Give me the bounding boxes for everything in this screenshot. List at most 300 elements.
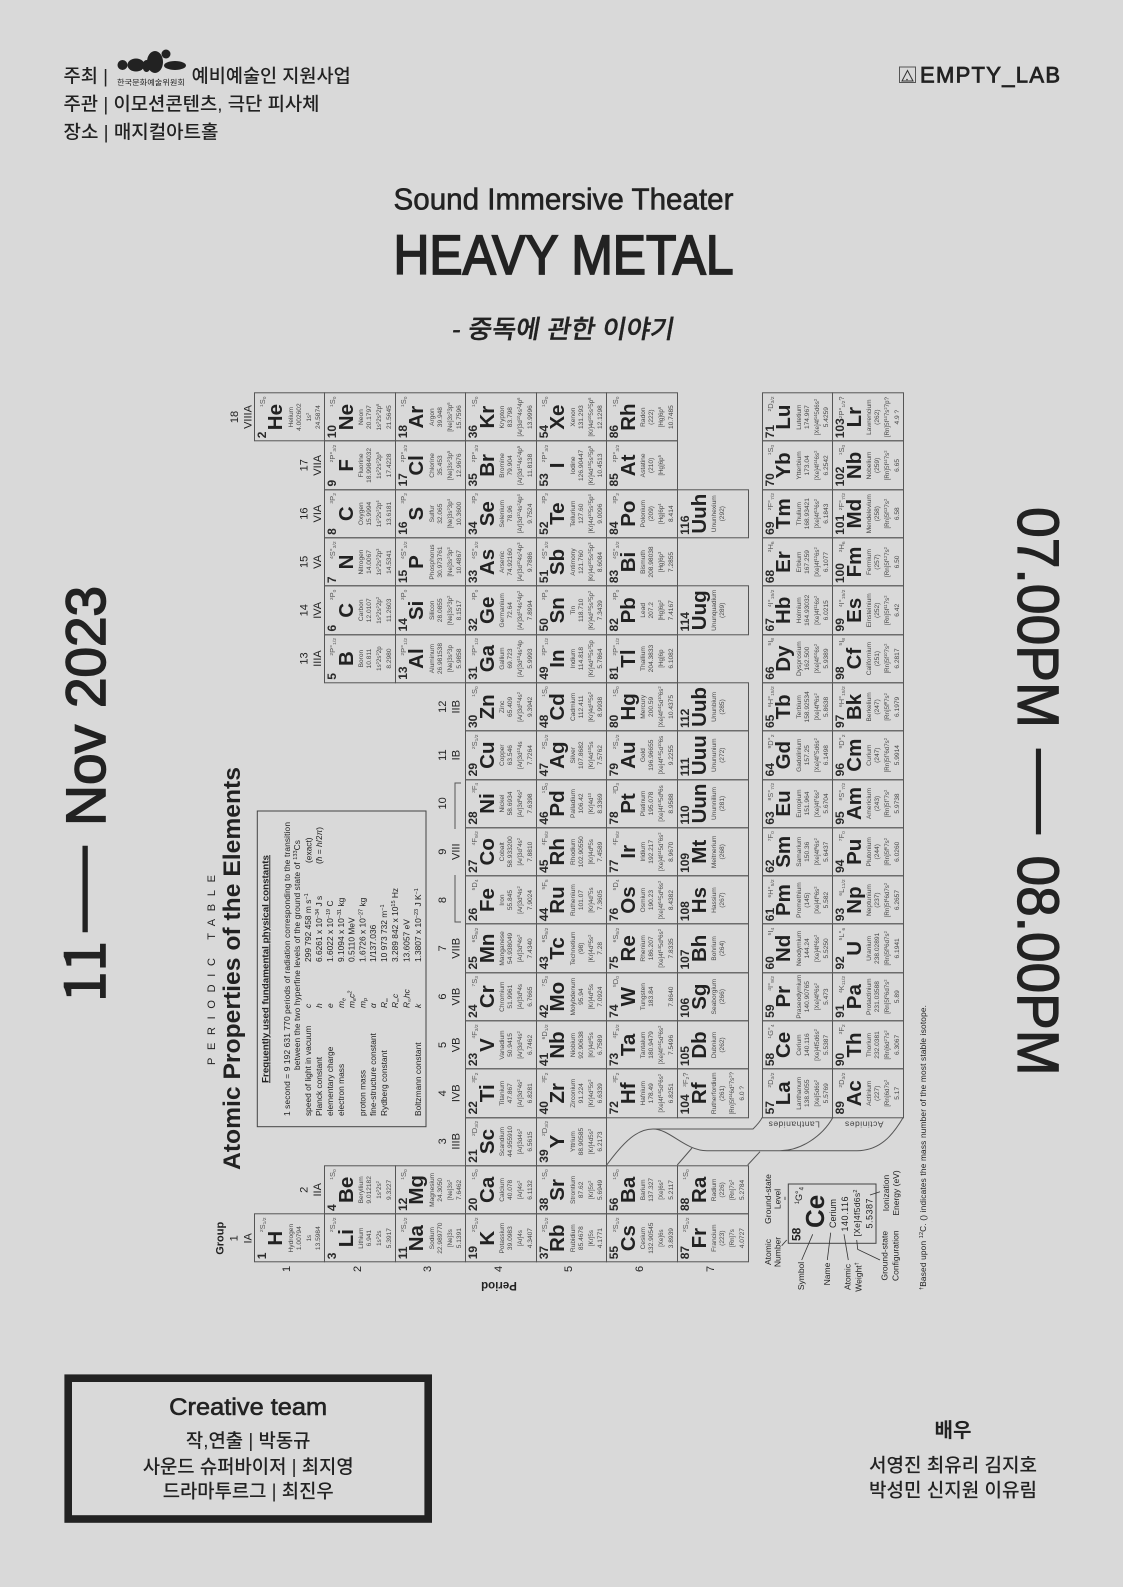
Ga: Gallium	[499, 647, 506, 670]
legend: element key: 5.5387	[865, 1198, 875, 1228]
I: [Kr]4d105s25p5	[587, 446, 595, 485]
Ta: 7.5496	[668, 1035, 675, 1055]
La: La	[772, 1081, 795, 1105]
time: 08.00PM	[1005, 856, 1070, 1076]
Ar: 39.948	[437, 407, 444, 427]
constants text: C	[325, 900, 335, 909]
Cs	[606, 1214, 678, 1263]
group labels: 14	[298, 604, 310, 616]
Pr: [Xe]4f36s2	[813, 983, 821, 1010]
Ni: [Ar]3d84s2	[516, 790, 524, 817]
Po: Polonium	[640, 500, 647, 527]
Db: (262)	[719, 1037, 726, 1053]
group labels: IVA	[312, 601, 324, 619]
Pd: 106.42	[578, 793, 585, 814]
Tm	[762, 489, 833, 538]
I: 2P°3/2	[540, 445, 550, 462]
W: Tungsten	[640, 983, 647, 1010]
Am: Am	[843, 787, 866, 820]
In: 114.818	[578, 647, 585, 670]
Ru: Ruthenium	[570, 884, 577, 916]
Mn: Mn	[476, 934, 499, 963]
Es: [Rn]5f117s2	[884, 596, 891, 625]
F: 18.9984032	[366, 448, 373, 483]
Fm: 3H6	[837, 541, 847, 552]
Cu: 29	[466, 763, 480, 776]
Ni: 58.6934	[507, 792, 514, 815]
period labels: 5	[563, 1266, 575, 1272]
Cm: (247)	[874, 747, 881, 763]
Fm	[832, 537, 904, 587]
P: 30.973761	[437, 546, 444, 578]
No: Nb	[843, 452, 866, 479]
Th: 232.0381	[874, 1031, 881, 1059]
Bi: Bismuth	[640, 550, 647, 574]
icon: arts council logo: 한국문화예술위원회	[117, 77, 185, 87]
Br: 79.904	[507, 455, 514, 475]
Ba: Ba	[617, 1177, 640, 1203]
group labels: VIIIA	[242, 404, 254, 429]
Se: 78.96	[507, 505, 514, 522]
Zr	[536, 1069, 607, 1118]
Bi: 83	[607, 570, 621, 583]
Pa: Protactinium	[866, 978, 873, 1015]
footnote: †	[919, 1287, 925, 1290]
Lr: 103	[833, 418, 847, 438]
Ta: [Xe]4f145d36s2	[658, 1026, 665, 1064]
Cs: Cesium	[640, 1227, 647, 1249]
Al: 2P°1/2	[399, 638, 409, 656]
Po: 3P2	[611, 493, 621, 504]
group labels: VIIA	[312, 454, 324, 476]
legend: element key: 2	[853, 1190, 859, 1193]
Fr: Francium	[711, 1224, 718, 1252]
Ce: Ce	[772, 1032, 795, 1058]
Zn: 30	[466, 715, 480, 728]
Al: 26.981538	[437, 643, 444, 674]
constants text: 1/137.036	[368, 924, 378, 962]
Mo	[536, 972, 607, 1021]
Ag: 47	[537, 763, 551, 776]
O: Oxygen	[358, 502, 365, 525]
Pd: 46	[537, 811, 551, 825]
I: 10.4513	[597, 453, 604, 477]
Si: 3P0	[399, 590, 409, 600]
Mn: [Ar]3d54s2	[516, 935, 524, 962]
Bh	[677, 924, 749, 973]
Bi: Bi	[617, 552, 640, 572]
He: 1s2	[305, 413, 312, 422]
Co: 4F9/2	[470, 831, 480, 845]
Gd: Gadolinium	[796, 739, 803, 772]
constants text: speed of light in vacuum	[303, 1026, 313, 1116]
Fr: Fr	[688, 1228, 711, 1248]
Sb: Sb	[546, 549, 569, 575]
Co: 7.8810	[527, 842, 534, 862]
constants text: α	[368, 1003, 378, 1008]
group labels: Group	[214, 1222, 226, 1255]
Ru: 44	[537, 908, 551, 921]
Se: Selenium	[499, 500, 506, 527]
Rf: 6.0 ?	[739, 1086, 746, 1101]
Xe: [Kr]4d105s25p6	[587, 398, 595, 437]
Pm: Promethium	[796, 882, 803, 918]
Lu: [Xe]4f145d6s2	[813, 399, 821, 435]
Tc: 43	[537, 956, 551, 970]
Ne: 20.1797	[366, 405, 373, 429]
constants text: Boltzmann constant	[413, 1042, 423, 1116]
Np: [Rn]5f46d7s2	[884, 883, 891, 917]
group labels: 17	[298, 459, 310, 471]
K: 4.3407	[527, 1228, 534, 1248]
Uub: Ununbium	[711, 692, 718, 722]
Uuh: 116	[678, 515, 692, 535]
F: Fluorine	[358, 453, 365, 477]
Ho: Holmium	[796, 597, 803, 623]
Br: 35	[466, 473, 480, 487]
Pu: [Rn]5f67s2	[884, 838, 891, 866]
Cf: 6.2817	[894, 649, 901, 669]
constants text: m	[358, 1001, 368, 1008]
Hg: Mercury	[640, 695, 647, 719]
Xe: 54	[537, 425, 551, 438]
Ta: Tantalum	[640, 1032, 647, 1058]
Pd: 8.3369	[597, 793, 604, 814]
constants text: −19	[326, 909, 332, 918]
Sr	[536, 1165, 607, 1215]
Pt: Pt	[617, 793, 640, 814]
O: 13.6181	[386, 502, 393, 526]
Mt: 109	[678, 853, 692, 873]
Sr: 38	[537, 1198, 551, 1211]
Mn: 25	[466, 956, 480, 970]
Ac: 89	[833, 1101, 847, 1114]
Bk: 6H°15/2	[837, 686, 847, 707]
Sr: [Kr]5s2	[587, 1181, 595, 1199]
Ba: 137.327	[648, 1178, 655, 1202]
Fm: [Rn]5f127s2	[884, 547, 891, 577]
S: [Ne]3s23p4	[446, 499, 454, 528]
legend: element key: Cerium	[828, 1199, 838, 1228]
Cs: 55	[607, 1246, 621, 1259]
Ac: 5.17	[894, 1087, 901, 1100]
Hf: 72	[607, 1101, 621, 1114]
Nd: 5.5250	[823, 938, 830, 958]
Na: 11	[396, 1247, 410, 1259]
Sc: 21	[466, 1149, 480, 1163]
Pb: Lead	[640, 603, 647, 618]
Rf: Rutherfordium	[711, 1072, 718, 1114]
Uuu: Unununium	[711, 738, 718, 772]
Rn: 1S0	[611, 396, 621, 407]
constants text: 2	[348, 991, 354, 995]
Cu	[465, 731, 537, 780]
icon: arts council logo	[117, 50, 186, 87]
constants text: (ħ = h/2π)	[314, 827, 324, 864]
Ga: 69.723	[507, 649, 514, 669]
Fm: 6.50	[894, 556, 901, 568]
cast names: 서영진 최유리 김지호	[869, 1455, 1037, 1477]
K: 39.0983	[507, 1226, 514, 1250]
constants text: 1.3807 x 10	[413, 918, 423, 962]
Ir: 77	[607, 860, 621, 873]
Pu	[832, 827, 904, 876]
Be	[324, 1165, 396, 1215]
constants text: between the two hyperfine levels of the ground state of	[292, 862, 302, 1070]
Ti: Titanium	[499, 1081, 506, 1106]
Hf: Hafnium	[640, 1081, 647, 1106]
group labels: 18	[229, 411, 241, 423]
Rn: (222)	[648, 409, 655, 425]
Ag	[536, 731, 607, 780]
Cl: 2P°3/2	[399, 445, 409, 462]
Pt: 78	[607, 811, 621, 825]
group labels: VIB	[450, 988, 462, 1005]
N	[324, 537, 396, 587]
Md: Mendelevium	[866, 494, 873, 533]
Na: 2S1/2	[399, 1218, 409, 1232]
Ne: 1S0	[328, 396, 339, 407]
In: Indium	[570, 649, 577, 668]
Gd: Gd	[772, 741, 795, 769]
Rn: 10.7485	[668, 405, 675, 429]
Dy: Dy	[772, 645, 795, 672]
Te: Te	[546, 503, 569, 525]
group labels: VIIB	[450, 938, 462, 959]
In: [Kr]4d105s25p	[587, 640, 595, 677]
Lr: [Rn]5f147s27p?	[884, 397, 891, 437]
As: As	[476, 549, 499, 575]
Ra: Ra	[688, 1177, 711, 1203]
Al: Aluminum	[429, 644, 436, 673]
K: [Ar]4s	[517, 1230, 524, 1246]
Hg: [Xe]4f145d106s2	[658, 686, 665, 727]
Sg: Seaborgium	[711, 979, 718, 1014]
Pa: Pa	[843, 984, 866, 1009]
Ti: 22	[466, 1101, 480, 1114]
Uuq	[677, 586, 749, 635]
Tm: Thulium	[796, 502, 803, 525]
Rh: 4F9/2	[540, 831, 550, 845]
Sb: 51	[537, 570, 551, 583]
Nd: Nd	[772, 935, 795, 962]
Rb	[536, 1214, 607, 1263]
Bi: 4S°3/2	[611, 541, 621, 559]
constants text: k	[413, 1003, 423, 1008]
Hs: Hassium	[711, 887, 718, 913]
C: Carbon	[358, 599, 365, 621]
Nd: 60	[763, 956, 777, 970]
constants text: 10 973 732 m	[379, 911, 389, 962]
W: 183.84	[648, 987, 655, 1007]
Ir: Iridium	[640, 842, 647, 862]
Er: 68	[763, 570, 777, 583]
Lu	[762, 392, 833, 442]
Lr: Lr	[843, 407, 866, 427]
S: 3P2	[399, 493, 409, 504]
Yb: Yb	[772, 452, 795, 479]
Md: 2F°7/2	[837, 493, 847, 510]
Tc: 7.28	[597, 942, 604, 955]
date: Nov	[54, 725, 117, 826]
Y: 39	[537, 1149, 551, 1163]
Sm	[762, 827, 833, 876]
Ir: Ir	[617, 845, 640, 859]
Be: 9.012182	[366, 1176, 373, 1204]
Ho: 4I°15/2	[766, 590, 776, 607]
Au: [Xe]4f145d106s	[658, 736, 665, 775]
Pu: 94	[833, 860, 847, 873]
Tc: (98)	[578, 943, 585, 954]
Er: Erbium	[796, 552, 803, 572]
B	[324, 634, 396, 683]
Po: Po	[617, 501, 640, 527]
C: C	[335, 603, 358, 618]
Pd: [Kr]4d10	[587, 793, 595, 814]
U: 6.1941	[894, 938, 901, 958]
H: Hydrogen	[288, 1224, 294, 1252]
Cr	[465, 972, 537, 1021]
At: (210)	[648, 458, 655, 473]
Yb	[762, 441, 833, 490]
Rn: [Hg]6p6	[658, 407, 665, 427]
Bi: [Hg]6p3	[658, 552, 665, 572]
Ag: Silver	[570, 747, 577, 763]
Br: Br	[476, 454, 499, 477]
group labels: VIA	[312, 504, 324, 522]
Cl: Chlorine	[429, 453, 436, 478]
Ti: 6.8281	[527, 1083, 534, 1103]
group labels: IVB	[450, 1084, 462, 1102]
Cf	[832, 634, 904, 683]
Fr: 2S1/2	[681, 1218, 692, 1232]
constants text: hc	[402, 988, 412, 998]
Hf: 6.8251	[668, 1083, 675, 1103]
Uub: Uub	[688, 687, 711, 727]
Ra: 1S0	[681, 1169, 692, 1180]
Pt: Platinum	[640, 791, 647, 816]
Zr: 91.224	[578, 1083, 585, 1103]
Cr: [Ar]3d54s	[516, 984, 524, 1009]
constants text	[282, 822, 423, 1116]
period labels: 1	[281, 1266, 293, 1272]
O: 3P2	[328, 493, 339, 504]
Ba: [Xe]6s2	[658, 1180, 665, 1200]
Uuq: Uug	[688, 590, 711, 630]
As: 74.92160	[507, 548, 514, 576]
Cm: 9D°2	[837, 735, 847, 748]
legend: element key: Energy (eV)	[891, 1170, 901, 1216]
Zn: 65.409	[507, 697, 514, 717]
Pb: 82	[607, 618, 621, 631]
organiser line 2: 주관 | 이모션콘텐츠, 극단 피사체	[64, 94, 320, 115]
V: [Ar]3d34s2	[516, 1031, 524, 1059]
Am	[832, 779, 904, 828]
constants text: kg	[358, 897, 368, 909]
Zr: 3F2	[540, 1073, 550, 1083]
No: 102	[833, 467, 847, 487]
Cl: Cl	[405, 455, 428, 476]
legend: element key: [Xe]4f5d6s	[852, 1193, 862, 1236]
Cr: 24	[466, 1004, 480, 1018]
Eu: 151.964	[804, 792, 811, 815]
Sc: 6.5615	[527, 1131, 534, 1152]
Ar: 1S0	[399, 396, 409, 407]
legend: element key: Ce	[800, 1195, 830, 1228]
La: 57	[763, 1101, 777, 1114]
Na: [Ne]3s	[447, 1229, 454, 1247]
Uun: Ununnilium	[711, 787, 718, 820]
F: 1s22s22p5	[375, 452, 383, 479]
Ca: Calcium	[499, 1178, 506, 1202]
Ge: 72.64	[507, 602, 514, 619]
Nb: 6D1/2	[540, 1024, 550, 1039]
Ac: Actinium	[866, 1081, 873, 1106]
Pa	[832, 972, 904, 1021]
Tl: 6.1082	[668, 649, 675, 669]
Uuh: Ununhexium	[711, 495, 718, 532]
Ho	[762, 586, 833, 635]
Se: 9.7524	[527, 504, 534, 524]
constants text: e	[342, 998, 348, 1001]
O: 15.9994	[366, 502, 373, 526]
Pm: 6H°5/2	[766, 879, 776, 897]
group labels: IIA	[312, 1182, 324, 1197]
W: 7.8640	[668, 987, 675, 1007]
Db: Db	[688, 1031, 711, 1059]
Rf: 3F2?	[681, 1073, 692, 1087]
Ba: 5.2117	[668, 1180, 675, 1200]
Hs	[677, 875, 749, 925]
Cl: 12.9676	[456, 453, 463, 477]
tagline: - 중독에 관한 이야기	[450, 315, 677, 344]
La: Lanthanum	[796, 1077, 803, 1110]
Co: 27	[466, 860, 480, 873]
Cd	[536, 682, 607, 732]
Tb: 158.92534	[804, 691, 811, 722]
Au: 2S1/2	[611, 735, 621, 749]
Rh: 102.90550	[578, 836, 585, 867]
Y: 6.2173	[597, 1131, 604, 1152]
Pr: 140.90765	[804, 981, 811, 1012]
Fe	[465, 875, 537, 925]
Pu: Plutonium	[866, 837, 873, 866]
Lu: Lu	[772, 405, 795, 430]
U: 92	[833, 956, 847, 970]
group labels: VB	[450, 1038, 462, 1052]
W: W	[617, 987, 640, 1006]
Pb: 207.2	[648, 602, 655, 619]
Mg: 24.3050	[437, 1178, 444, 1202]
Ru: 101.07	[578, 890, 585, 910]
Co: 58.933200	[507, 836, 514, 867]
Co: Co	[476, 838, 499, 865]
In: 49	[537, 666, 551, 680]
organiser line 1	[64, 66, 351, 87]
C: 11.2603	[386, 599, 393, 622]
U: 238.02891	[874, 933, 881, 964]
Pa: 4K11/2	[837, 976, 847, 993]
Fr	[677, 1214, 749, 1263]
Ni: 7.6398	[527, 793, 534, 814]
V	[465, 1020, 537, 1070]
Sb: Antimony	[570, 548, 577, 576]
W: 5D0	[611, 976, 621, 987]
constants text: −1	[304, 893, 310, 900]
Rb: Rubidium	[570, 1224, 577, 1252]
Fe: 5D4	[470, 879, 480, 890]
Fr: (223)	[719, 1230, 726, 1246]
